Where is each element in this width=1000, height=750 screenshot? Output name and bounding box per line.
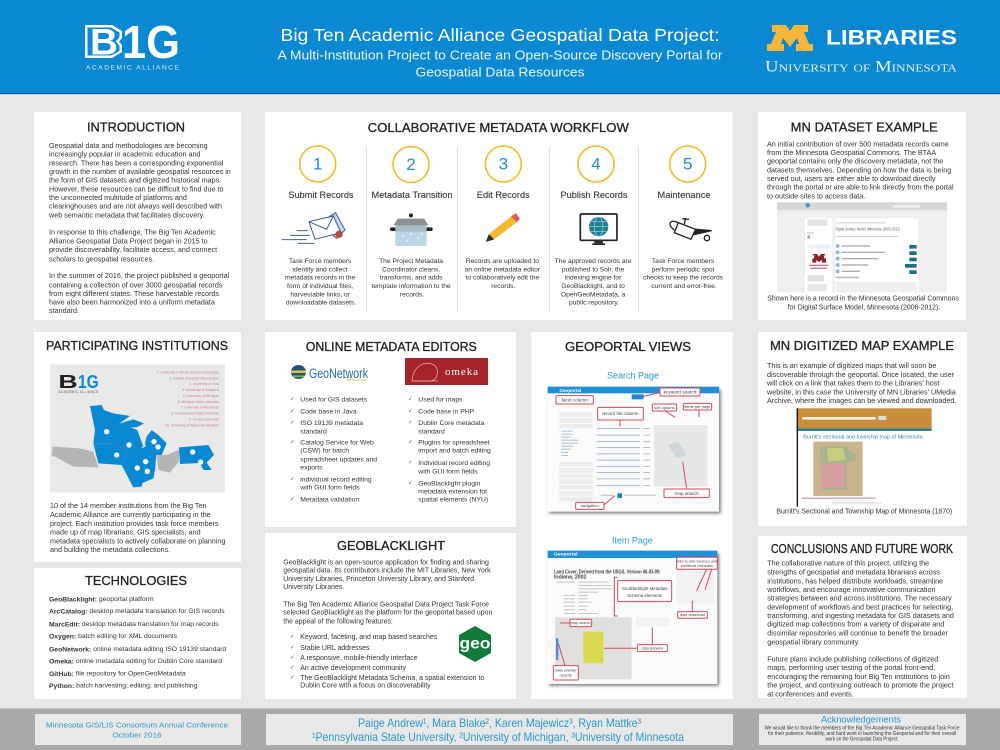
step 4: publish records: Publish Records [560, 190, 628, 200]
step 2: metadata transition: 2 [406, 155, 416, 174]
list: GeoNetwork features: with GUI form fields [299, 484, 360, 491]
list: technologies: MarcEdit: desktop metadata translation for map records [49, 621, 219, 628]
map of participating institutions [50, 364, 225, 492]
text: conclusions body: at conferences and events. [767, 689, 854, 698]
list: Omeka features: GeoBlacklight plugin [418, 480, 480, 487]
footer: acknowledgements: work on the Geospatial Data Project. [826, 736, 898, 742]
text: introduction body: from eight different states. These harvestable records [49, 288, 219, 298]
logo: Big Ten Academic Alliance [85, 16, 180, 72]
list: Omeka features: ✓ [408, 440, 413, 446]
screenshot: item page [548, 551, 719, 686]
logo: University of Minnesota Libraries [765, 25, 957, 76]
callout: sort options: sort options [654, 405, 675, 410]
footer: acknowledgements: Acknowledgements [821, 714, 901, 726]
map of participating institutions: 9. Purdue University [189, 418, 219, 422]
logo: GeoNetwork [291, 365, 369, 382]
step 5: maintenance [643, 146, 725, 290]
step 2: metadata transition: transforms, and adds [380, 274, 443, 281]
step 3: edit records: Edit Records [477, 190, 530, 200]
text: conclusions body: development of workflows and best practices for selecting, [767, 602, 953, 611]
callout: links to web services [676, 557, 717, 569]
main title: Geospatial Data Resources [416, 64, 585, 80]
text: introduction body: have also been harmonized into a uniform metadata [49, 297, 215, 306]
label: item page: Item Page [612, 536, 653, 546]
text: digitized map description: discoverable through the geoportal. Once located, the user [767, 370, 955, 378]
step 4: publish records [555, 146, 633, 306]
text: dataset description: from the Minnesota Geospatial Commons. The BTAA [767, 148, 936, 156]
text: institutions description: metadata specialists to actively collaborate on planning [50, 536, 225, 545]
panel: collaborative metadata workflow [265, 112, 733, 320]
footer: authors: Paige Andrew¹, Mara Blake², Karen Majewicz³, Ryan Mattke³ [358, 716, 641, 730]
step 3: edit records: to collaboratively edit the [466, 274, 539, 281]
list: Omeka features: ✓ [408, 480, 413, 486]
icon: pot [390, 213, 433, 246]
logo: Big Ten Academic Alliance: ACADEMIC ALLIANCE [86, 64, 180, 72]
heading: participating institutions: PARTICIPATING INSTITUTIONS [46, 339, 228, 353]
step 2: metadata transition: template information to the [371, 282, 451, 290]
text: geoblacklight description: University Libraries. [283, 584, 344, 590]
logo: University of Minnesota Libraries: University of Minnesota [765, 58, 957, 76]
screenshot: item page: Indiana, 2002 [554, 574, 587, 580]
text: conclusions body: the project, and continuing outreach to promote the project [767, 680, 954, 689]
heading: conclusions: CONCLUSIONS AND FUTURE WORK [771, 542, 954, 556]
step 1: submit records: form of individual files, [287, 282, 353, 290]
callout: map search: map search [674, 491, 699, 496]
step 1: submit records: Submit Records [288, 190, 354, 200]
step 5: maintenance: Maintenance [658, 190, 710, 200]
step 2: metadata transition: Coordinator cleans, [382, 266, 440, 273]
list: Omeka features: with GUI form fields [417, 468, 478, 475]
logo: University of Minnesota Libraries: LIBRARIES [826, 26, 957, 50]
footer: conference: October 2016 [112, 730, 162, 740]
list: GeoNetwork features: Code base in Java [300, 408, 357, 415]
text: introduction body: provide discoverability, facilitate access, and connect [49, 244, 217, 254]
callout: facet column: facet column [561, 397, 588, 402]
map of participating institutions: 10. University of Wisconsin-Madison [165, 424, 219, 428]
text: conclusions body: Future plans include publishing collections of digitized [767, 654, 938, 663]
list: technologies: ArcCatalog: desktop metadata translation for GIS records [49, 608, 225, 615]
heading: geoportal views: GEOPORTAL VIEWS [565, 340, 691, 354]
text: introduction body: clearinghouses and are not always well described with [49, 201, 222, 210]
list: Omeka features: ✓ [408, 420, 413, 426]
screenshot: Burritt's map record: Burritt's sectional and township map of Minnesota [803, 435, 923, 441]
step 4: publish records: public repository. [569, 299, 619, 306]
callout: data download: data download [680, 613, 705, 617]
list: GeoNetwork features: ✓ [290, 440, 295, 446]
logo: Omeka: omeka [445, 366, 478, 378]
list: GeoNetwork features: ✓ [290, 420, 295, 426]
callout: items per page: items per page [684, 404, 711, 409]
heading: MN digitized map example: MN DIGITIZED MAP EXAMPLE [770, 339, 954, 353]
text: geoblacklight description: geospatial data. Its contributors include the MIT Libraries, New York [283, 567, 491, 574]
text: conclusions body: The collaborative nature of this project, utilizing the [767, 558, 929, 567]
caption: dataset screenshot: Shown here is a record in the Minnesota Geospatial Commons [767, 295, 959, 302]
list: GeoNetwork features: exports [300, 464, 323, 471]
panel: introduction [34, 112, 241, 320]
callout: map search [570, 619, 592, 627]
list: GeoNetwork features: ✓ [290, 408, 295, 414]
text: introduction body: web semantic metadata that facilitates discovery. [48, 210, 205, 219]
main title [278, 25, 723, 80]
step 2: metadata transition: records. [400, 291, 424, 298]
text: geoblacklight description: the appeal of the following features: [283, 618, 393, 625]
step 2: metadata transition: Metadata Transition [372, 190, 452, 200]
list: geoblacklight features: ✓ [290, 665, 295, 671]
heading: geoblacklight: GEOBLACKLIGHT [337, 539, 445, 553]
list: Omeka features [408, 396, 493, 503]
text: introduction body: the form of GIS datasets and digitized historical maps. [49, 175, 221, 184]
panel: technologies [34, 568, 241, 699]
step 4: publish records: GeoBlacklight, and to [561, 282, 625, 290]
list: GeoNetwork features: (CSW) for batch [300, 447, 349, 454]
text: dataset description: datasets themselves. Depending on how the data is being [767, 165, 951, 174]
logo: GeoNetwork: opensource [347, 378, 367, 382]
text: dataset description: geoportal contains only the discovery metadata, not the [767, 156, 943, 165]
text: institutions description: project. Each institution provides task force members [50, 518, 219, 528]
list: Omeka features: import and batch editing [418, 447, 491, 454]
footer: acknowledgements [759, 714, 966, 745]
list: GeoNetwork features: ISO 19139 metadata [300, 420, 363, 426]
map of participating institutions: 1. University of Illinois Urbana-Champaign [157, 370, 219, 374]
list: geoblacklight features: ✓ [290, 655, 295, 661]
text: introduction body: growth in the number of available geospatial resources in [49, 166, 231, 176]
text: introduction body: increasingly popular in academic education and [49, 149, 200, 158]
callout: data overlay opacity [553, 666, 578, 680]
logo: GeoNetwork: GeoNetwork [309, 365, 369, 381]
text: introduction body: Alliance Geospatial Data Project began in 2015 to [49, 236, 208, 245]
callout: keyword search: keyword search [664, 389, 697, 394]
step 5: maintenance: perform periodic spot [652, 266, 715, 273]
screenshot: Burritt's map record [797, 408, 932, 507]
caption: map screenshot: Burritt's Sectional and Township Map of Minnesota (1870) [776, 508, 952, 516]
step 4: publish records: published to Solr, the [562, 266, 625, 273]
text: dataset description: served out, users are either able to download directly [767, 174, 936, 182]
text: dataset description: An initial contribution of over 500 metadata records came [767, 139, 949, 148]
list: geoblacklight features: Keyword, faceting, and map based searches [300, 634, 438, 640]
map of participating institutions: B [58, 371, 78, 392]
list: geoblacklight features: ✓ [290, 634, 295, 640]
icon: monitor with globe [580, 214, 617, 245]
text: introduction body: containing a collection of over 3000 geospatial records [49, 280, 223, 289]
screenshot: search page [548, 387, 721, 513]
text: introduction body: research. There has been a corresponding exponential [49, 158, 224, 167]
list: technologies: GitHub: file repository for OpenGeoMetadata [49, 670, 186, 678]
list: technologies: GeoBlacklight: geoportal platform [49, 596, 154, 603]
map of participating institutions: 6. Michigan State University [178, 400, 219, 404]
list: Omeka features: metadata extension for [418, 488, 488, 495]
heading: technologies: TECHNOLOGIES [85, 574, 187, 588]
text: conclusions body: strengths of geospatial and metadata librarians across [767, 567, 940, 576]
text: digitized map description: This is an example of digitized maps that will soon be [767, 360, 936, 370]
caption: dataset screenshot: for Digital Surface Model, Minnesota (2006-2012). [788, 304, 940, 311]
text: conclusions body: institutions, has helped distribute workloads, streamline [767, 576, 943, 585]
text: geoblacklight description: The Big Ten Academic Alliance Geospatial Data Project Task Force [283, 601, 489, 608]
main title: A Multi-Institution Project to Create an Open-Source Discovery Portal for [278, 48, 723, 62]
step 4: publish records: The approved records are [555, 258, 632, 264]
map of participating institutions: 2. Indiana University Bloomington [169, 376, 219, 380]
map of participating institutions: ACADEMIC ALLIANCE [58, 390, 99, 394]
panel: geoportal views [531, 332, 733, 699]
step 1: submit records: identify and collect [293, 266, 348, 273]
panel: participating institutions [34, 332, 241, 562]
text: digitized map description: website, in this case the University of MN Libraries' UMedia [766, 387, 956, 396]
list: Omeka features: Code base in PHP [418, 408, 475, 415]
list: geoblacklight features: ✓ [290, 645, 295, 651]
step 3: edit records [465, 146, 542, 290]
step 1: submit records [282, 146, 357, 306]
list: GeoNetwork features: standard [300, 428, 327, 435]
step 2: metadata transition: The Project Metadata [379, 258, 443, 264]
list: geoblacklight features: ✓ [290, 675, 295, 681]
text: introduction body: standard. [49, 306, 79, 314]
heading: MN dataset example: MN DATASET EXAMPLE [791, 120, 938, 134]
list: technologies [49, 596, 226, 690]
panel: conclusions and future work [758, 536, 967, 698]
icon: envelopes [282, 213, 345, 243]
text: institutions description: Academic Alliance are currently participating in the [50, 510, 211, 518]
text: introduction body: the unconnected multitude of platforms and [49, 192, 187, 202]
heading: workflow: COLLABORATIVE METADATA WORKFLOW [368, 121, 629, 135]
icon: oil can [670, 218, 712, 241]
list: GeoNetwork features: ✓ [290, 477, 295, 483]
text: institutions description: 10 of the 14 member institutions from the Big Ten [50, 500, 206, 510]
list: technologies: Python: batch harvesting, editing, and publishing [49, 682, 198, 690]
step 4: publish records: 4 [591, 154, 601, 174]
callout: items per page [683, 403, 712, 410]
text: institutions description: made up of map librarians, GIS specialists, and [50, 527, 201, 536]
map of participating institutions: 8. Pennsylvania State University [171, 412, 219, 416]
step 1: submit records: metadata records in the [285, 274, 355, 281]
text: conclusions body: transforming, and ingesting metadata for GIS datasets and [767, 610, 954, 620]
step 5: maintenance: checks to keep the records [643, 274, 724, 281]
text: conclusions body: maps, performing user testing of the portal front-end, [767, 662, 935, 672]
panel: geoblacklight [265, 533, 516, 699]
header banner [0, 0, 1000, 94]
list: GeoNetwork features: Catalog Service for Web [300, 439, 374, 446]
step 4: publish records: indexing engine for [565, 274, 622, 281]
step 1: submit records: Task Force members [289, 258, 352, 264]
panel: MN digitized map example [758, 332, 967, 526]
callout: schema elements [618, 581, 672, 602]
footer: acknowledgements: We would like to thank the members of the Big Ten Academic Alliance Geospatial Task Force [764, 725, 960, 731]
callout: data overlay opacity: data overlay [555, 668, 576, 672]
text: introduction body: In response to this challenge, The Big Ten Academic [49, 227, 216, 236]
screenshot: search page: Geoportal [559, 388, 581, 393]
step 5: maintenance: 5 [683, 154, 692, 174]
callout: links to web services: links to web services and [676, 559, 717, 563]
footer: authors [266, 714, 733, 745]
list: GeoNetwork features: ✓ [290, 396, 295, 402]
callout: navigation [576, 502, 604, 509]
callout: data download [678, 612, 707, 618]
logo: geo hexagon: geo [460, 636, 491, 652]
text: introduction body: scholars to geospatial resources. [49, 254, 154, 263]
step 3: edit records: an online metadata editor [465, 266, 541, 273]
list: GeoNetwork features: ✓ [290, 496, 295, 502]
list: Omeka features: Used for maps [418, 396, 463, 403]
callout: record list column [598, 407, 643, 420]
text: conclusions body: encouraging the remaining four Big Ten institutions to join [767, 672, 950, 680]
footer: authors: ¹Pennsylvania State University, ²University of Michigan, ³University of Minnesota [312, 730, 684, 744]
callout: map search [664, 489, 709, 498]
screenshot: item page: Land Cover, Derived from the USGS, Version 06-03-99: [554, 569, 661, 575]
list: Omeka features: Plugins for spreadsheet [418, 439, 490, 446]
callout: data preview [637, 645, 667, 652]
list: GeoNetwork features: individual record editing [300, 476, 372, 483]
screenshot: Minnesota Geospatial Commons record [777, 202, 947, 292]
text: geoblacklight description: selected GeoBlacklight as the platform for the geoportal based upon [283, 609, 492, 616]
list: geoblacklight features [290, 634, 486, 689]
step 3: edit records: Records are uploaded to [466, 258, 539, 264]
list: technologies: Oxygen: batch editing for XML documents [49, 633, 178, 640]
list: Omeka features: standard [418, 428, 445, 435]
map of participating institutions: 4. University of Maryland [182, 388, 219, 392]
list: geoblacklight features: Stable URL addresses [300, 644, 370, 652]
text: conclusions body: digitized map collections from a variety of disparate and [767, 619, 944, 628]
list: technologies: Omeka: online metadata editing for Dublin Core standard [49, 658, 222, 665]
callout: map search: map search [571, 621, 591, 625]
list: GeoNetwork features [290, 396, 379, 503]
panel: online metadata editors [265, 332, 516, 527]
list: geoblacklight features: Dublin Core with a focus on discoverability [300, 682, 431, 689]
list: GeoNetwork features: Used for GIS datasets [300, 396, 368, 403]
text: conclusions body: workflows, and encourage innovative communication [766, 584, 936, 594]
callout: links to web services: additional metadata [681, 564, 714, 568]
footer: conference: Minnesota GIS/LIS Consortium Annual Conference [46, 720, 228, 730]
heading: online metadata editors: ONLINE METADATA EDITORS [306, 340, 477, 354]
text: introduction body: In the summer of 2016, the project published a geoportal [49, 270, 230, 280]
logo: Omeka [405, 358, 488, 385]
main title: Big Ten Academic Alliance Geospatial Data Project: [280, 25, 720, 45]
list: Omeka features: ✓ [408, 408, 413, 414]
list: Omeka features: ✓ [408, 396, 413, 402]
label: search page: Search Page [607, 371, 659, 381]
footer: conference [35, 714, 241, 745]
text: dataset description: through the portal or are able to link directly from the portal [767, 182, 954, 191]
text: geoblacklight description: University Libraries, Princeton University Library, and Stanford [283, 576, 474, 582]
step 1: submit records: harvestable links, or [290, 291, 351, 298]
text: conclusions body: dissimilar repositories will continue to benefit the broader [767, 628, 948, 637]
logo: geo hexagon [459, 626, 491, 662]
map of participating institutions: 3. University of Iowa [189, 382, 219, 386]
callout: facet column [556, 396, 593, 404]
step 5: maintenance: Task Force members [652, 258, 715, 264]
step 2: metadata transition [371, 146, 453, 298]
callout: navigation: navigation [581, 503, 599, 508]
list: Omeka features: Dublin Core metadata [418, 420, 485, 426]
text: conclusions body: strategies between and across institutions. The necessary [767, 593, 952, 602]
callout: schema elements: Schema elements [627, 593, 662, 598]
map of participating institutions: 7. University of Minnesota [181, 406, 219, 410]
map of participating institutions: 5. University of Michigan [183, 394, 219, 398]
callout: record list column: record list column [602, 411, 639, 416]
footer: acknowledgements: for their patience, flexibility, and hard work in launching the Geoportal and for their overall [768, 731, 956, 737]
step 3: edit records: 3 [499, 154, 508, 174]
text: introduction body: However, these resources can be difficult to find due to [49, 184, 223, 193]
list: GeoNetwork features: spreadsheet updates and [300, 456, 377, 463]
callout: keyword search [660, 388, 700, 396]
logo: Big Ten Academic Alliance: B [90, 22, 118, 62]
panel: MN dataset example [758, 112, 966, 320]
screenshot: item page: Geoportal [554, 551, 578, 557]
text: dataset description: to outside sites to access data. [767, 191, 865, 200]
callout: data preview: data preview [641, 646, 663, 650]
heading: introduction: INTRODUCTION [87, 120, 185, 134]
text: institutions description: and building the metadata collections. [50, 544, 170, 554]
step 3: edit records: records. [491, 282, 516, 290]
list: Omeka features: spatial elements (NYU) [418, 496, 488, 503]
callout: sort options [652, 404, 677, 411]
list: Omeka features: ✓ [408, 460, 413, 466]
step 1: submit records: 1 [313, 154, 322, 174]
icon: pencil [486, 213, 520, 242]
logo: Big Ten Academic Alliance: 1G [122, 16, 180, 68]
list: geoblacklight features: A responsive, mobile-friendly interface [300, 654, 418, 662]
text: geoblacklight description: GeoBlacklight is an open-source application for finding and sharing [283, 559, 489, 566]
list: technologies: GeoNetwork: online metadata editing ISO 19139 standard [49, 646, 226, 653]
callout: schema elements: GeoBlacklight Metadata [622, 586, 668, 591]
list: geoblacklight features: The GeoBlacklight Metadata Schema, a spatial extension to [300, 674, 484, 682]
footer bar [0, 708, 1000, 750]
step 4: publish records: OpenGeoMetadata, a [561, 291, 626, 298]
step 1: submit records: downloadable datasets. [286, 299, 356, 306]
step 5: maintenance: current and error-free. [651, 282, 717, 290]
text: digitized map description: Archive, where the images can be viewed and downloaded. [767, 396, 956, 404]
callout: data overlay opacity: opacity [560, 674, 572, 678]
text: conclusions body: geospatial library community. [767, 637, 860, 646]
screenshot: Minnesota Geospatial Commons record: Digital Surface Model, Minnesota (2006-2012) [835, 226, 900, 232]
text: digitized map description: will click on a link that takes them to the Libraries' host [766, 378, 939, 387]
list: geoblacklight features: An active development community [300, 664, 406, 672]
list: Omeka features: Individual record editing [418, 460, 490, 466]
list: GeoNetwork features: Metadata validation [300, 496, 359, 503]
text: introduction body: Geospatial data and methodologies are becoming [49, 140, 208, 150]
map of participating institutions: 1G [78, 371, 99, 392]
